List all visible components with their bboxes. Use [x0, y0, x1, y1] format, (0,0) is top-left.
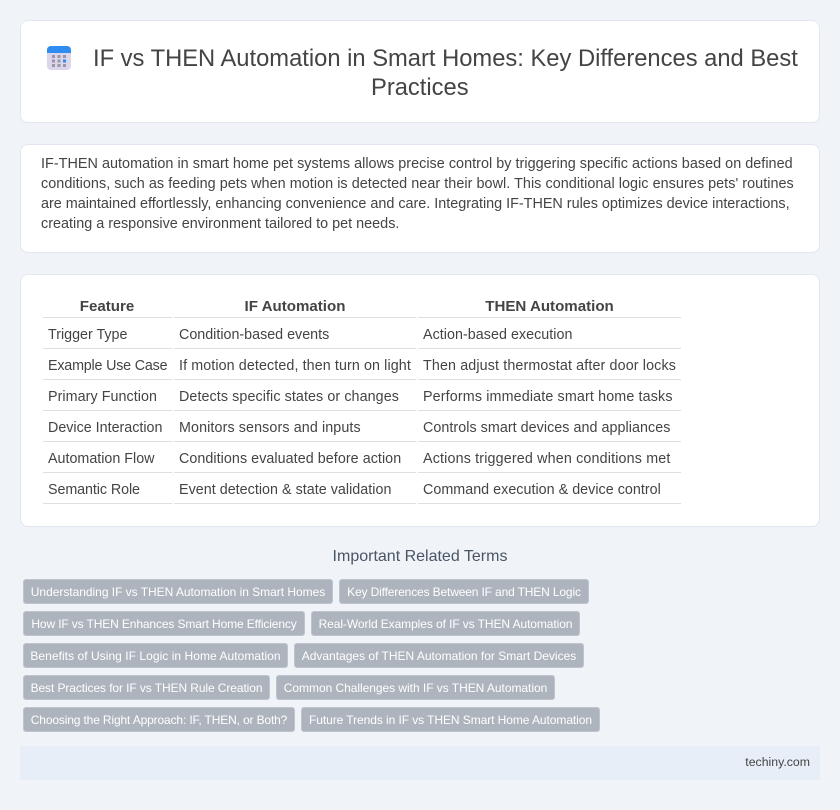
row: Device Interaction: Monitors sensors and inputs [179, 420, 361, 436]
text block: introduction [41, 156, 794, 232]
panel: comparison table [20, 274, 820, 527]
row: Example Use Case: Then adjust thermostat after door locks [423, 358, 676, 374]
row: Primary Function: Performs immediate smart home tasks [423, 389, 673, 405]
footer bar: techiny.com [745, 755, 810, 769]
row: Automation Flow: Conditions evaluated before action [179, 451, 401, 467]
tag: Common Challenges with IF vs THEN Automation [284, 681, 547, 695]
row: Device Interaction [48, 420, 670, 436]
row: Automation Flow [48, 451, 671, 467]
footer bar [20, 746, 820, 780]
row: Semantic Role: Semantic Role [48, 482, 140, 498]
row: Example Use Case: If motion detected, then turn on light [179, 358, 411, 374]
row: Semantic Role: Command execution & device control [423, 482, 661, 498]
row: Trigger Type: Trigger Type [48, 327, 127, 343]
title [93, 46, 798, 101]
row: Semantic Role: Event detection & state validation [179, 482, 391, 498]
row: Automation Flow: Actions triggered when conditions met [423, 451, 671, 467]
panel: title card [20, 20, 820, 123]
row: Automation Flow: Automation Flow [48, 451, 154, 467]
tag [294, 643, 584, 668]
row: Primary Function [48, 389, 673, 405]
row: Trigger Type: Action-based execution [423, 327, 573, 343]
tag: Advantages of THEN Automation for Smart Devices [302, 649, 576, 663]
tag [311, 611, 580, 636]
row: Device Interaction: Controls smart devices and appliances [423, 420, 670, 436]
tag [301, 707, 600, 732]
text block: introduction: conditions, such as feeding pets when motion is detected near their bowl. This conditional logic ensures pets' routines [41, 176, 794, 192]
tag [23, 643, 288, 668]
text block: introduction: are maintained effortlessly, enhancing convenience and care. Integrating IF-THEN rules optimizes device interactions, [41, 196, 790, 212]
tag: Choosing the Right Approach: IF, THEN, or Both? [31, 713, 287, 727]
title: Practices [371, 75, 469, 101]
tag [339, 579, 589, 604]
tag [23, 611, 305, 636]
row: Example Use Case: Example Use Case [48, 358, 167, 374]
text block: introduction: IF-THEN automation in smart home pet systems allows precise control by triggering specific actions based on defined [41, 156, 793, 172]
row: Example Use Case [48, 358, 676, 374]
tag: Understanding IF vs THEN Automation in Smart Homes [31, 585, 325, 599]
tag: Best Practices for IF vs THEN Rule Creation [31, 681, 262, 695]
tag [276, 675, 555, 700]
tag: Key Differences Between IF and THEN Logic [347, 585, 581, 599]
row: Primary Function: Primary Function [48, 389, 157, 405]
tag [23, 579, 333, 604]
row: Primary Function: Detects specific states or changes [179, 389, 399, 405]
icon: calendar [47, 46, 71, 70]
table header: Feature: Feature [80, 298, 134, 315]
tag [23, 675, 270, 700]
table header: THEN Automation: THEN Automation [485, 298, 614, 315]
heading: related terms: Important Related Terms [333, 548, 507, 565]
row: Trigger Type: Condition-based events [179, 327, 329, 343]
text block: introduction: creating a responsive environment tailored to pet needs. [41, 216, 399, 232]
row: Trigger Type [48, 327, 573, 343]
tag: Future Trends in IF vs THEN Smart Home Automation [309, 713, 592, 727]
table header: IF Automation: IF Automation [245, 298, 345, 315]
row: Device Interaction: Device Interaction [48, 420, 162, 436]
tag [23, 707, 295, 732]
row: Semantic Role [48, 482, 661, 498]
title: IF vs THEN Automation in Smart Homes: Key Differences and Best [93, 46, 798, 72]
tag: Real-World Examples of IF vs THEN Automation [319, 617, 572, 631]
tag: Benefits of Using IF Logic in Home Automation [30, 649, 281, 663]
panel: introduction [20, 144, 820, 253]
tag: How IF vs THEN Enhances Smart Home Efficiency [31, 617, 297, 631]
